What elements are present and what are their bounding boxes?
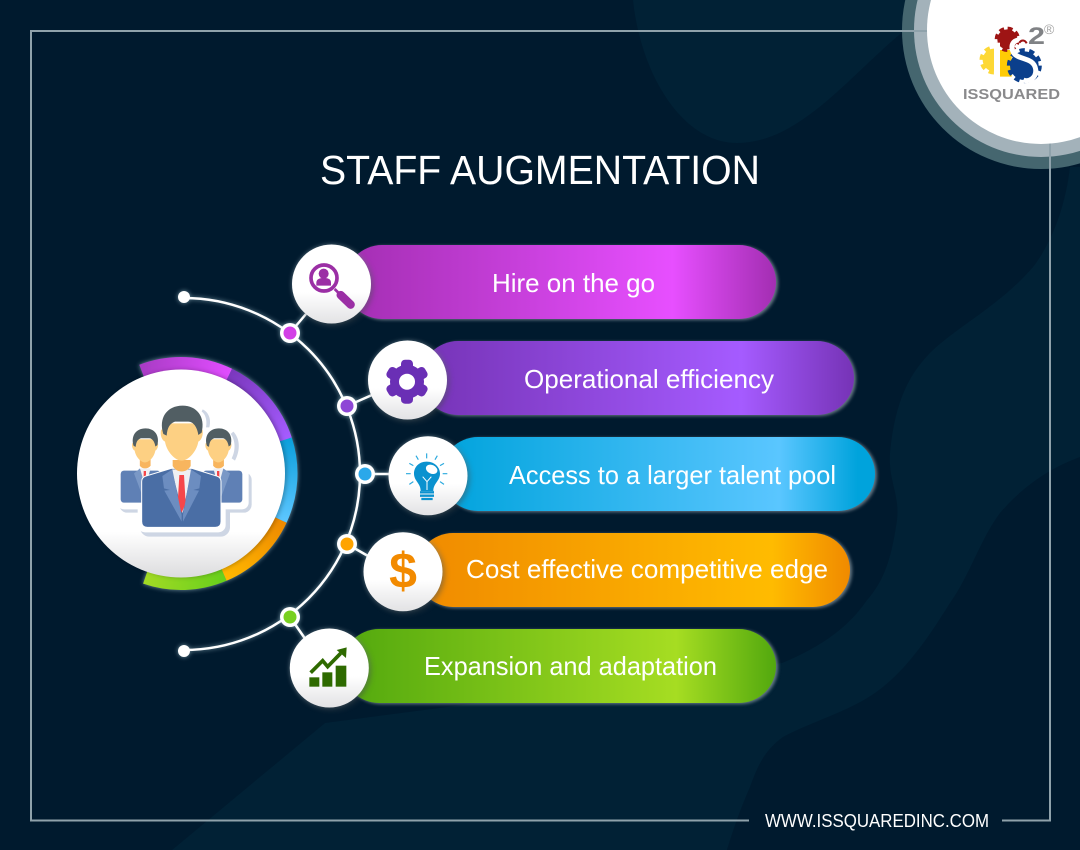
icon disc	[368, 340, 447, 420]
icon disc	[290, 628, 369, 708]
icon disc	[292, 244, 371, 324]
node: violet	[337, 396, 357, 416]
icon: growth chart	[309, 647, 347, 687]
icon: dollar sign: $	[389, 543, 417, 599]
segmented ring	[142, 363, 291, 584]
logo superscript 2: 2	[1028, 23, 1045, 50]
item 2: operational efficiency	[368, 340, 854, 420]
item 4: cost effective competitive edge	[364, 532, 850, 611]
label: Hire on the go	[492, 268, 655, 298]
label: Cost effective competitive edge	[466, 554, 828, 584]
icon disc	[364, 532, 442, 611]
node: blue	[355, 464, 375, 484]
registered mark: ®	[1044, 21, 1055, 37]
logo badge	[927, 0, 1080, 144]
node: pink	[280, 323, 300, 343]
node: orange	[337, 534, 357, 554]
label: Access to a larger talent pool	[509, 460, 836, 490]
white disc	[77, 370, 285, 578]
icon: gear	[385, 360, 429, 404]
logo mark: gears	[981, 28, 1040, 81]
connector arc	[178, 291, 392, 657]
pill	[441, 437, 875, 511]
item 5: expansion and adaptation	[290, 628, 776, 708]
icon: team of three people	[117, 406, 252, 537]
pill	[342, 629, 776, 703]
pill	[421, 341, 854, 415]
item 1: hire on the go	[292, 244, 776, 324]
logo badge rings	[902, 0, 1080, 169]
item 3: access to a larger talent pool	[388, 436, 875, 515]
label: Expansion and adaptation	[424, 651, 717, 681]
icon: light bulb	[406, 453, 447, 499]
website url: WWW.ISSQUAREDINC.COM	[765, 811, 989, 831]
pill	[416, 533, 850, 607]
central emblem	[77, 363, 291, 584]
logo wordmark: ISSQUARED	[963, 87, 1060, 103]
title: STAFF AUGMENTATION	[320, 147, 760, 193]
icon disc	[388, 436, 468, 515]
label: Operational efficiency	[524, 364, 774, 394]
icon: magnifier over person	[311, 265, 351, 305]
pill	[345, 245, 776, 319]
node: green	[280, 607, 300, 627]
